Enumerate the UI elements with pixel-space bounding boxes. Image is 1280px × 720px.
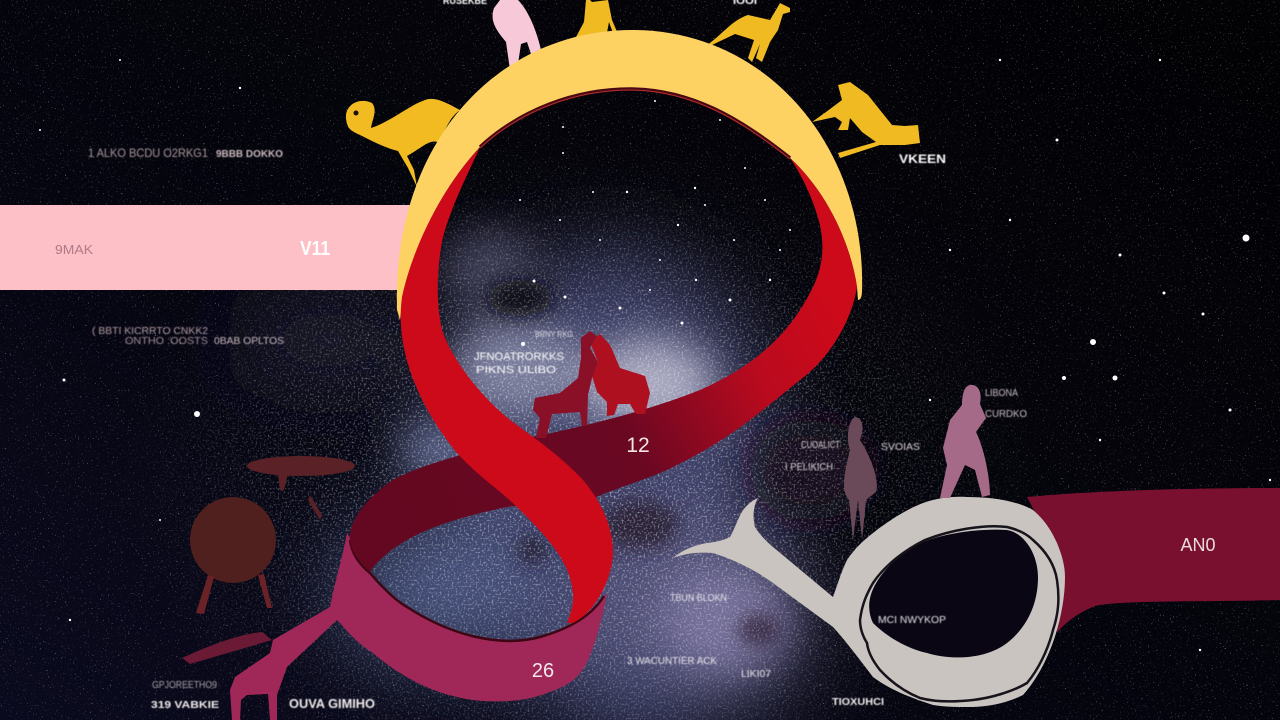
text labels: 1 ALKO BCDU O2RKG1: [88, 146, 208, 160]
chart: grey tailed ring: [673, 497, 1065, 707]
panel: maroon right band: [1027, 488, 1280, 633]
icon: pink llama: [493, 0, 541, 70]
text labels: ( BBTI KICRRTO CNKK2: [92, 326, 208, 337]
icon: yellow top animal: [576, 0, 618, 38]
text labels: 0BAB OPLTOS: [214, 336, 284, 347]
chart: maroon-to-red band: [350, 158, 857, 572]
panel: maroon right band: AN0: [1180, 535, 1216, 555]
text labels: 9BBB DOKKO: [216, 149, 283, 160]
text labels: MCI NWYKOP: [878, 615, 946, 626]
text labels: I PELIKICH: [785, 462, 833, 473]
icon: dark round stool: [190, 497, 276, 614]
panel: pink bar: [0, 205, 430, 290]
icon: mauve figure: [940, 385, 990, 498]
text labels: 319 VABKIE: [151, 700, 219, 711]
text labels: OUVA GIMIHO: [289, 696, 375, 711]
panel: pink bar: 9MAK: [55, 242, 93, 257]
text labels: GPJOREETHO9: [152, 680, 217, 691]
chart: dark red ring edge: [480, 89, 790, 159]
chart: maroon-to-red band: 12: [626, 434, 650, 457]
text labels: TIOXUHCI: [832, 697, 884, 708]
panel: pink bar: V11: [300, 238, 330, 260]
icon: yellow gazelle: [707, 3, 790, 62]
text labels: SVOIAS: [881, 442, 920, 453]
label: 26: 26: [532, 660, 554, 682]
chart: yellow ring: [397, 30, 862, 320]
text labels: CURDKO: [985, 409, 1027, 420]
text labels: LIKI07: [741, 669, 771, 680]
text labels: CUOALICT: [801, 440, 840, 451]
text labels: VKEEN: [899, 152, 946, 166]
text labels: TBUN BLOKN: [670, 593, 727, 604]
text labels: BRNY RKG: [535, 330, 573, 339]
text labels: ONTHO :OOSTS: [125, 336, 208, 347]
text labels: 3 WACUNTIER ACK: [627, 656, 717, 667]
text labels: LIBONA: [985, 388, 1018, 399]
icon: llama pair: [533, 331, 650, 438]
text labels: PIKNS ULIBO: [476, 365, 556, 376]
chart: bright red S ribbon: [401, 147, 613, 623]
icon: yellow camel: [812, 82, 920, 158]
icon: yellow ram: [346, 99, 460, 187]
text labels: JFNOATRORKKS: [474, 351, 564, 363]
icon: dark horn: [182, 632, 272, 664]
icon: dim figure: [844, 417, 877, 540]
text labels: [88, 0, 1027, 711]
chart: crimson lower ribbon with giraffe: [230, 533, 607, 720]
icon: dark table: [247, 456, 355, 520]
